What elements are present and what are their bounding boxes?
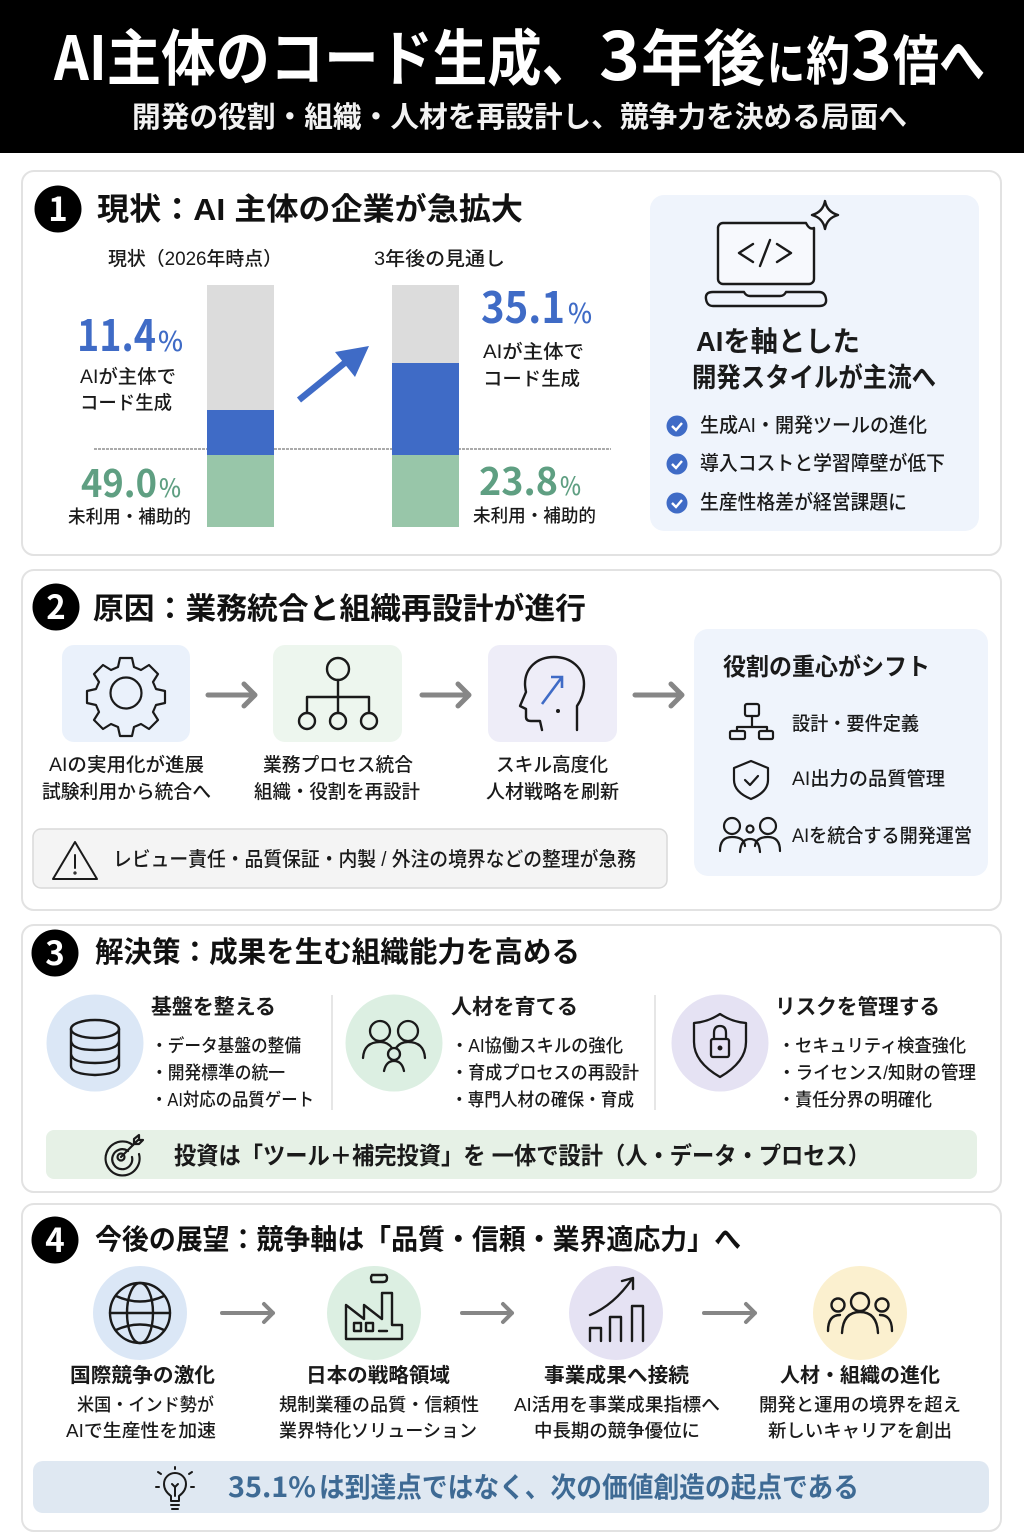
icon: light bulb	[156, 1467, 194, 1509]
panel: role shift	[694, 629, 988, 876]
section 3 number badge: 3	[45, 927, 65, 975]
risk text: ・責任分界の明確化	[778, 1090, 932, 1110]
conclusion text: 35.1%	[228, 1466, 316, 1506]
chart: stacked bars	[68, 248, 611, 527]
value: 23.8%: 23.8	[479, 451, 558, 506]
outlook: talent and organization	[759, 1266, 961, 1441]
investment text: 投資は「ツール＋補完投資」を 一体で設計（人・データ・プロセス）	[174, 1142, 870, 1170]
talent text	[451, 996, 639, 1110]
outlook text: 人材・組織の進化	[780, 1364, 940, 1387]
foundation text: ・開発標準の統一	[151, 1063, 285, 1083]
role item: operations	[720, 818, 972, 852]
section 4 number badge	[32, 1214, 78, 1264]
icon: shield lock	[694, 1014, 746, 1077]
arrow	[208, 684, 255, 706]
icon: org chart	[299, 658, 377, 729]
outlook text: 開発と運用の境界を超え	[759, 1395, 961, 1415]
icon: warning triangle	[53, 842, 97, 879]
label: unused current: 未利用・補助的	[68, 507, 191, 527]
section 3 heading: 解決策：成果を生む組織能力を高める	[95, 936, 580, 969]
warning box	[33, 829, 667, 888]
check item 1: 生成AI・開発ツールの進化	[700, 414, 927, 437]
arrow	[222, 1304, 273, 1322]
section 1 heading: 現状：AI 主体の企業が急拡大	[97, 192, 523, 227]
panel: section 3 solutions	[22, 925, 1001, 1192]
outlook text	[66, 1364, 216, 1441]
title: 約	[806, 20, 850, 95]
value: 49.0%: %	[159, 469, 181, 505]
check item 2: 導入コストと学習障壁が低下	[700, 452, 945, 475]
title: 3	[851, 4, 892, 100]
step text: 業務プロセス統合	[263, 754, 413, 776]
value: 11.4%: %	[158, 320, 183, 359]
solution: talent	[346, 994, 639, 1110]
icon: laptop with code	[706, 201, 838, 306]
outlook text: 中長期の競争優位に	[534, 1421, 700, 1441]
icon: head with arrow	[520, 657, 584, 730]
outlook text	[514, 1363, 720, 1441]
step text	[42, 754, 211, 803]
conclusion text	[228, 1466, 859, 1506]
foundation text: ・AI対応の品質ゲート	[151, 1090, 314, 1110]
arrow	[462, 1304, 512, 1322]
label: AI-led future: AIが主体で	[483, 341, 584, 363]
title: AI主体のコード生成、	[53, 9, 596, 98]
value: 11.4%: 11.4	[77, 302, 156, 364]
talent text: 人材を育てる	[451, 996, 578, 1019]
value: 49.0%: 49.0	[81, 453, 157, 508]
role item: operations: AIを統合する開発運営	[792, 825, 972, 847]
foundation text: 基盤を整える	[151, 996, 276, 1019]
callout heading: 開発スタイルが主流へ	[692, 362, 936, 393]
callout heading	[692, 326, 936, 393]
icon: globe	[110, 1283, 170, 1343]
header banner	[0, 0, 1024, 153]
column label: three years later: 3年後の見通し	[374, 248, 505, 270]
outlook text: AIで生産性を加速	[66, 1421, 216, 1441]
arrow	[635, 684, 682, 706]
step text: スキル高度化	[496, 754, 608, 776]
foundation text: ・データ基盤の整備	[151, 1035, 301, 1056]
icon: factory	[346, 1275, 402, 1339]
icon: group of people	[828, 1293, 892, 1333]
panel: section 4 outlook	[22, 1204, 1001, 1531]
icon: growth chart	[590, 1278, 643, 1341]
section 4 heading: 今後の展望：競争軸は「品質・信頼・業界適応力」へ	[95, 1224, 741, 1255]
section 1 number badge	[34, 183, 82, 232]
role item: design	[730, 704, 919, 739]
risk text: ・ライセンス/知財の管理	[778, 1063, 976, 1083]
step text	[254, 754, 420, 803]
section 1 number badge: 1	[48, 183, 68, 231]
step text: AIの実用化が進展	[49, 754, 204, 776]
section 4 number badge: 4	[45, 1214, 65, 1262]
bar: current	[207, 285, 274, 527]
title	[53, 4, 985, 100]
title: 3	[599, 4, 640, 100]
outlook text: 規制業種の品質・信頼性	[279, 1395, 479, 1415]
arrow	[422, 684, 469, 706]
foundation text	[151, 996, 314, 1110]
checklist	[666, 414, 945, 514]
value: 35.1%: 35.1	[481, 274, 565, 336]
risk text	[775, 996, 976, 1110]
step text: 組織・役割を再設計	[254, 781, 420, 803]
icon: database	[71, 1020, 119, 1075]
title: 年後	[641, 9, 765, 98]
arrow: growth	[299, 346, 369, 400]
outlook text: AI活用を事業成果指標へ	[514, 1395, 720, 1415]
outlook text: 業界特化ソリューション	[279, 1421, 477, 1441]
title: に	[767, 24, 805, 94]
role item: design: 設計・要件定義	[792, 713, 919, 735]
bar: three years later	[392, 285, 459, 527]
outlook text: 国際競争の激化	[70, 1364, 215, 1387]
role item: quality: AI出力の品質管理	[792, 768, 945, 790]
outlook text: 日本の戦略領域	[306, 1363, 450, 1387]
panel: section 2 causes	[22, 570, 1001, 910]
column label: current: 現状（2026年時点）	[108, 248, 282, 270]
outlook: business results	[514, 1266, 720, 1441]
label: AI-led current	[80, 366, 176, 414]
step text	[486, 754, 619, 803]
step card: practical AI	[42, 645, 211, 803]
label: AI-led future: コード生成	[483, 368, 580, 390]
icon: gear	[87, 658, 165, 736]
value: 35.1%: %	[568, 292, 592, 331]
section 2 number badge	[32, 581, 80, 630]
outlook text: 事業成果へ接続	[544, 1363, 689, 1387]
conclusion text: は到達点ではなく、次の価値創造の起点である	[319, 1472, 859, 1503]
label: unused future: 未利用・補助的	[473, 506, 596, 526]
icon: people	[363, 1021, 425, 1071]
icon: target	[106, 1135, 143, 1175]
section 2 heading: 原因：業務統合と組織再設計が進行	[93, 592, 586, 626]
solution: risk	[672, 994, 976, 1110]
section 2 number badge: 2	[46, 581, 66, 629]
talent text: ・AI協働スキルの強化	[451, 1036, 623, 1056]
step text: 人材戦略を刷新	[486, 781, 619, 803]
conclusion banner	[33, 1461, 989, 1513]
panel: section 1 current state	[22, 171, 1001, 555]
outlook text: 新しいキャリアを創出	[768, 1421, 952, 1441]
step card: skills	[486, 645, 619, 803]
outlook: Japan strategy	[279, 1266, 479, 1441]
section 3 number badge	[32, 927, 78, 976]
callout heading: AIを軸とした	[696, 326, 860, 357]
label: AI-led future	[483, 341, 584, 390]
step text: 試験利用から統合へ	[42, 781, 211, 803]
outlook text: 米国・インド勢が	[77, 1394, 214, 1415]
risk text: リスクを管理する	[775, 996, 940, 1019]
outlook text	[279, 1363, 479, 1441]
label: AI-led current: AIが主体で	[80, 366, 176, 388]
solution: foundation	[46, 994, 314, 1110]
talent text: ・専門人材の確保・育成	[451, 1090, 634, 1110]
risk text: ・セキュリティ検査強化	[778, 1036, 966, 1056]
step card: process integration	[254, 645, 420, 803]
role shift heading: 役割の重心がシフト	[723, 653, 930, 681]
label: AI-led current: コード生成	[80, 392, 172, 414]
outlook text	[759, 1364, 961, 1441]
role item: quality	[734, 761, 945, 799]
arrow	[704, 1304, 755, 1322]
investment banner	[46, 1130, 977, 1179]
check item 3: 生産性格差が経営課題に	[700, 491, 907, 514]
value: 23.8%: %	[560, 467, 581, 503]
talent text: ・育成プロセスの再設計	[451, 1063, 639, 1083]
subtitle: 開発の役割・組織・人材を再設計し、競争力を決める局面へ	[132, 101, 907, 134]
panel: AI-centered style	[650, 195, 979, 531]
title: 倍へ	[893, 17, 985, 96]
warning text: レビュー責任・品質保証・内製 / 外注の境界などの整理が急務	[113, 848, 636, 871]
outlook: global competition	[66, 1266, 216, 1441]
